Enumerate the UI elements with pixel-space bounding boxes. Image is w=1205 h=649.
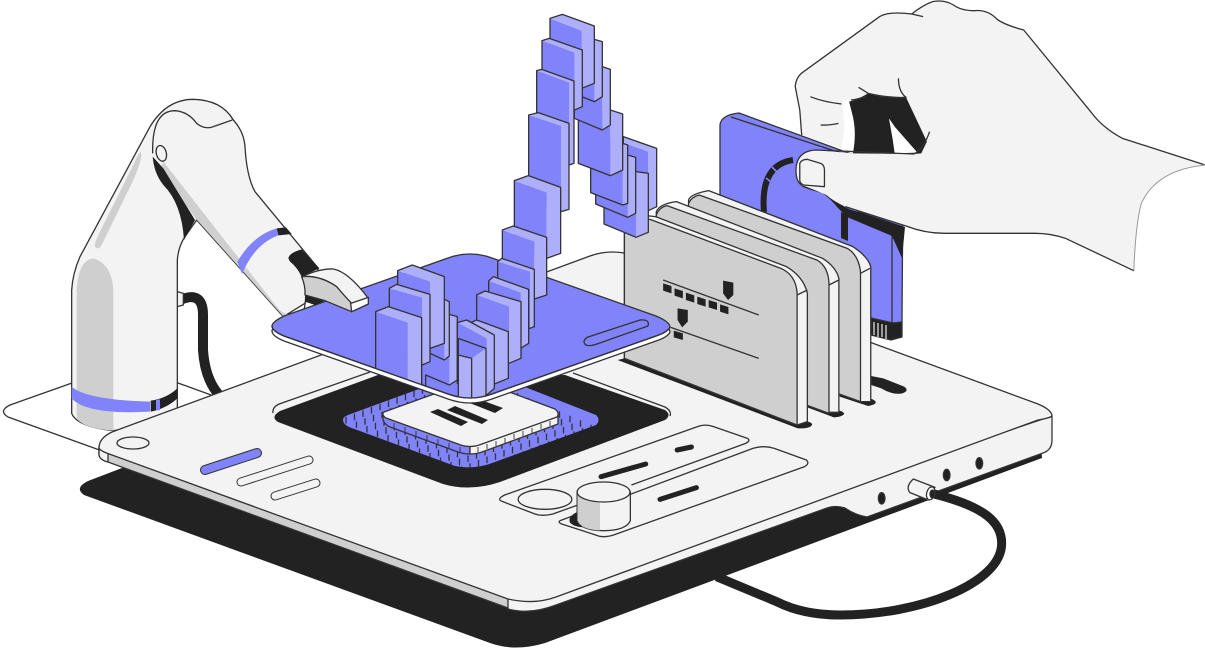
hardware: middle card [656, 202, 844, 417]
plate bars [376, 258, 534, 403]
left leg bars [502, 14, 594, 299]
right leg bars [574, 33, 657, 237]
board top surface [99, 252, 1052, 602]
side ports [878, 458, 983, 504]
board shadow [80, 430, 1042, 648]
floating bars [376, 14, 657, 403]
hardware: front card with markers [618, 213, 812, 428]
cable: robot arm [180, 297, 220, 396]
base plate under robot arm [3, 383, 225, 452]
hardware: purple back card [720, 113, 905, 340]
chip cavity with socket and chip [273, 371, 670, 488]
outline pill 2 [275, 483, 316, 496]
plate slot [584, 320, 648, 346]
lifted purple plate [272, 254, 670, 398]
robot hand [795, 1, 1205, 271]
purple pill fill [205, 453, 257, 470]
outline pill 1 [241, 460, 309, 482]
lifted plate rim [272, 259, 670, 403]
board left side strip [99, 447, 510, 608]
board left corner [99, 447, 108, 462]
plate lower edge [272, 326, 670, 398]
control panels with knob [500, 425, 808, 537]
robot gripper [302, 269, 368, 312]
outline pill 1 fill [241, 460, 309, 482]
purple slider pill [205, 453, 257, 470]
robot arm [72, 99, 319, 431]
board side strip and connector bump [508, 416, 1052, 611]
board corner hole [117, 437, 149, 449]
cable: board connector [717, 479, 1002, 615]
hardware: rear card [689, 191, 876, 406]
card slot 4 [871, 376, 907, 394]
outline pill 2 fill [275, 483, 316, 496]
